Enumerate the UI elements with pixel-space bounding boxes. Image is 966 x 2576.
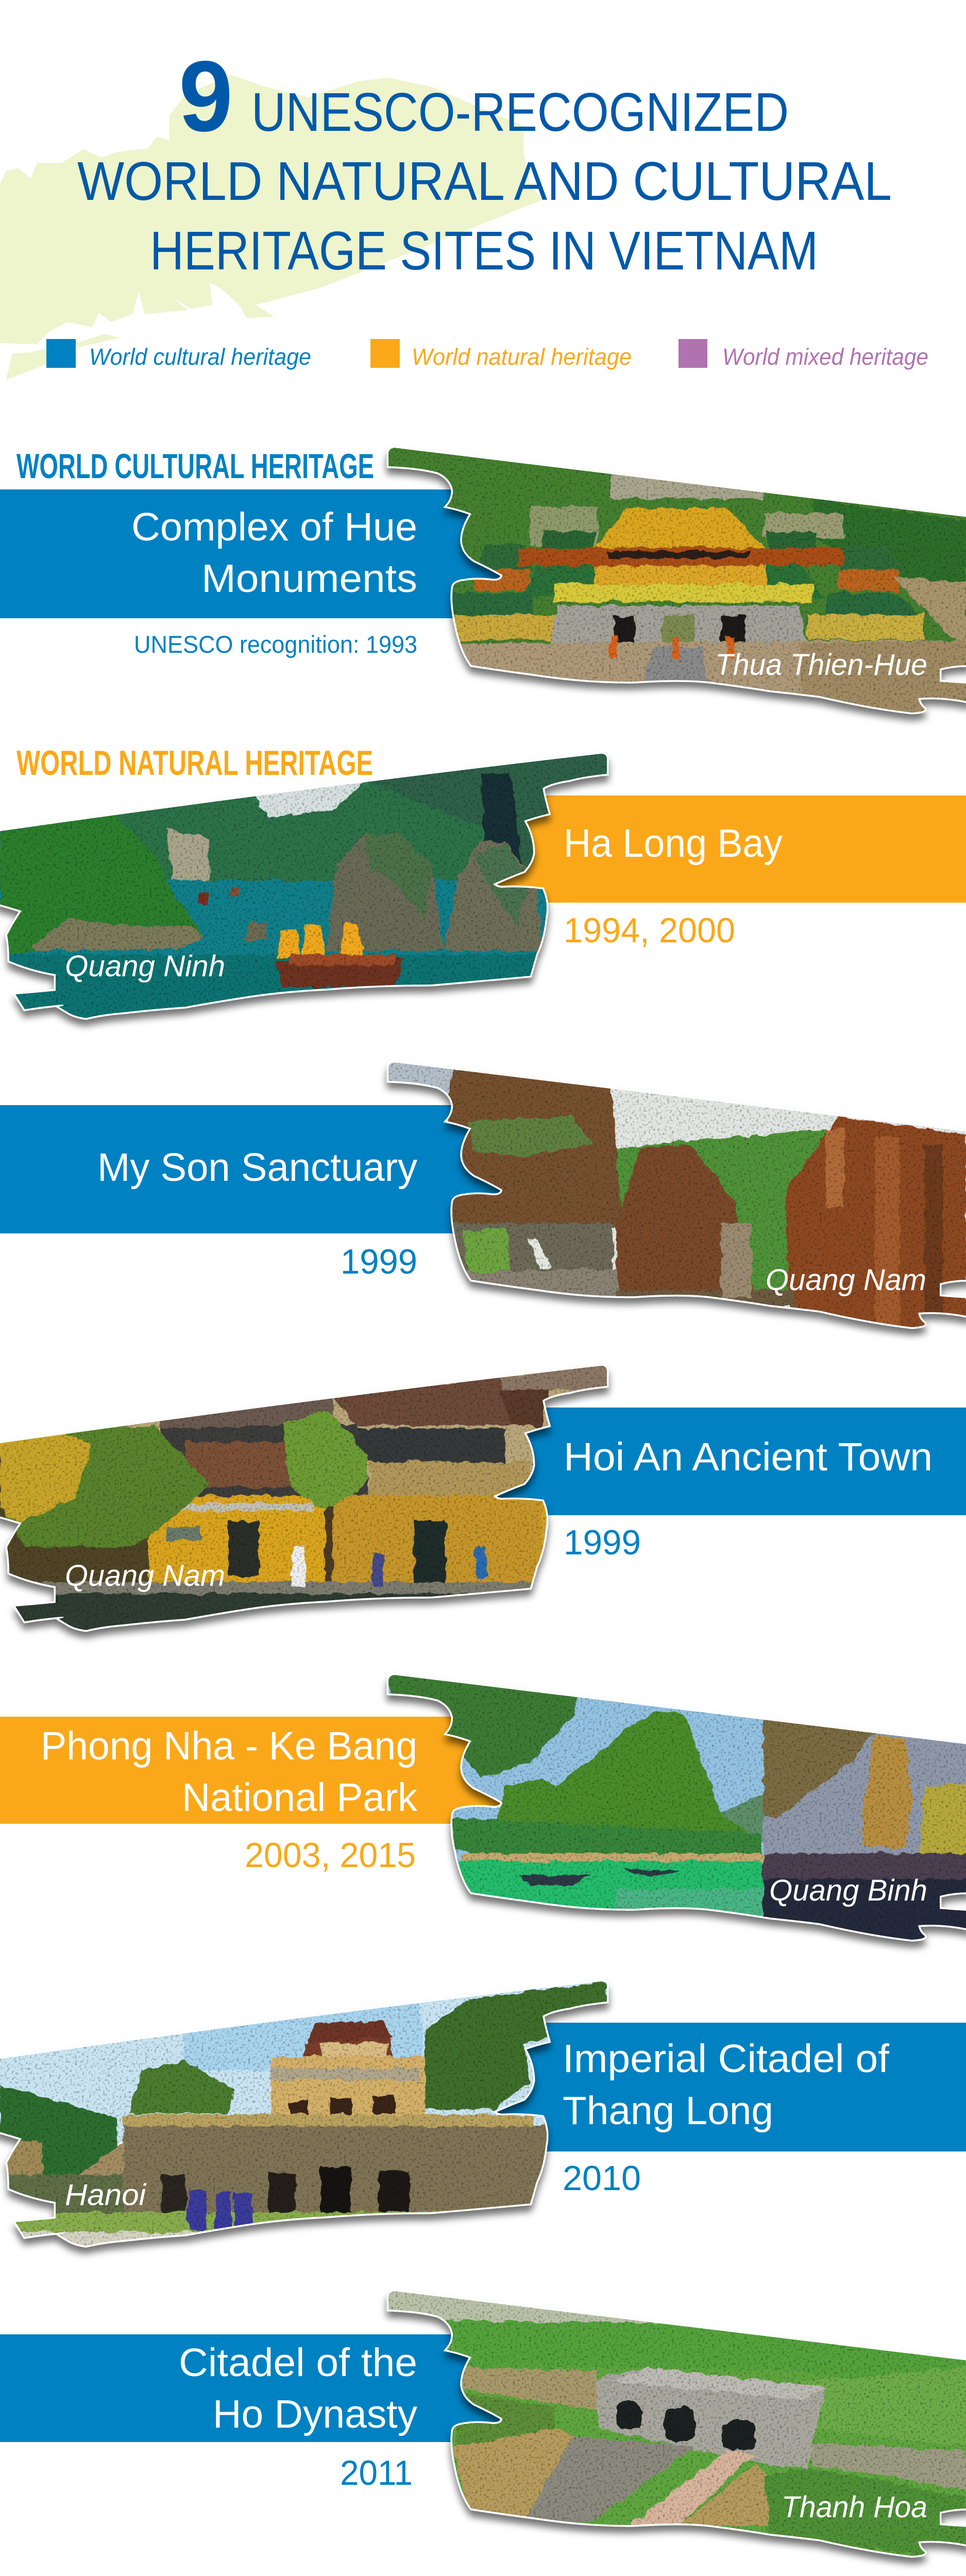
photo: Hoi An old street — [0, 1361, 616, 1673]
torn photo frame — [0, 754, 607, 1018]
colour bar — [492, 795, 966, 903]
recognition year: UNESCO recognition: 1993 — [134, 631, 417, 658]
location: Hanoi — [65, 2178, 147, 2212]
colour bar — [492, 1408, 966, 1515]
location: Quang Ninh — [65, 950, 225, 983]
photo: Ha Long Bay — [0, 754, 607, 1018]
recognition year: 1999 — [341, 1242, 417, 1281]
title line 3: HERITAGE SITES IN VIETNAM — [150, 221, 818, 281]
recognition year: 2011 — [340, 2453, 413, 2493]
site name — [131, 505, 417, 601]
location: Thanh Hoa — [782, 2490, 927, 2524]
title line 1: UNESCO-RECOGNIZED — [251, 82, 789, 143]
photo: Phong Nha mountain and cave — [382, 1672, 966, 1950]
panel: Complex of Hue Monuments — [0, 445, 966, 723]
colour bar — [0, 489, 504, 618]
photo: Hue imperial gate — [382, 445, 966, 723]
site name: Citadel of the — [179, 2341, 417, 2385]
torn photo frame — [388, 1062, 966, 1327]
legend: mixed — [679, 339, 928, 370]
panel: Citadel of the Ho Dynasty — [0, 2287, 966, 2576]
recognition years: 1994, 2000 — [564, 911, 735, 950]
site name: Ho Dynasty — [213, 2392, 417, 2436]
site name — [179, 2341, 417, 2436]
colour bar — [0, 1105, 504, 1233]
section heading: WORLD CULTURAL HERITAGE — [16, 447, 374, 486]
site name: Imperial Citadel of — [563, 2037, 890, 2081]
legend: natural: World natural heritage — [412, 344, 632, 370]
photo: Ho Dynasty citadel gate — [382, 2287, 966, 2576]
recognition years: 2003, 2015 — [245, 1836, 416, 1875]
site name: My Son Sanctuary — [97, 1145, 417, 1190]
legend: mixed: World mixed heritage — [722, 344, 928, 370]
location: Thua Thien-Hue — [715, 648, 927, 682]
legend: cultural — [46, 339, 311, 370]
colour bar — [492, 2023, 966, 2151]
title line 2: WORLD NATURAL AND CULTURAL — [77, 151, 892, 212]
site name: Phong Nha - Ke Bang — [41, 1724, 417, 1768]
section heading: WORLD NATURAL HERITAGE — [16, 743, 373, 783]
torn photo frame — [388, 2291, 966, 2556]
big number 9: 9 — [179, 40, 233, 152]
title — [77, 40, 892, 281]
panel: Ha Long Bay — [0, 750, 966, 1031]
photo: My Son towers — [382, 1058, 966, 1334]
location: Quang Nam — [766, 1263, 926, 1297]
legend: cultural: World cultural heritage — [89, 344, 311, 370]
photo: Thang Long citadel gate — [0, 1976, 616, 2311]
torn photo frame — [388, 1675, 966, 1940]
recognition year: 2010 — [563, 2159, 641, 2198]
panel: Hoi An Ancient Town — [0, 1361, 966, 1673]
site name: Monuments — [201, 556, 417, 601]
panel: Imperial Citadel of Thang Long — [0, 1976, 966, 2311]
torn photo frame — [0, 1981, 607, 2246]
legend — [46, 339, 928, 370]
site name: Complex of Hue — [131, 505, 417, 549]
site name: Hoi An Ancient Town — [564, 1435, 933, 1479]
torn photo frame — [0, 1366, 607, 1630]
recognition year: 1999 — [564, 1523, 641, 1562]
background leaf — [0, 75, 542, 380]
location: Quang Binh — [769, 1874, 927, 1907]
colour bar — [0, 2334, 504, 2442]
panel: Phong Nha - Ke Bang National Park — [0, 1672, 966, 1950]
legend: natural — [370, 339, 632, 370]
panel: My Son Sanctuary — [0, 1058, 966, 1334]
site name — [563, 2037, 890, 2133]
location: Quang Nam — [65, 1559, 225, 1592]
colour bar — [0, 1717, 504, 1824]
site name: Ha Long Bay — [564, 821, 783, 866]
site name: Thang Long — [563, 2089, 773, 2133]
site name: National Park — [182, 1775, 417, 1820]
site name — [41, 1724, 417, 1820]
torn photo frame — [388, 448, 966, 713]
